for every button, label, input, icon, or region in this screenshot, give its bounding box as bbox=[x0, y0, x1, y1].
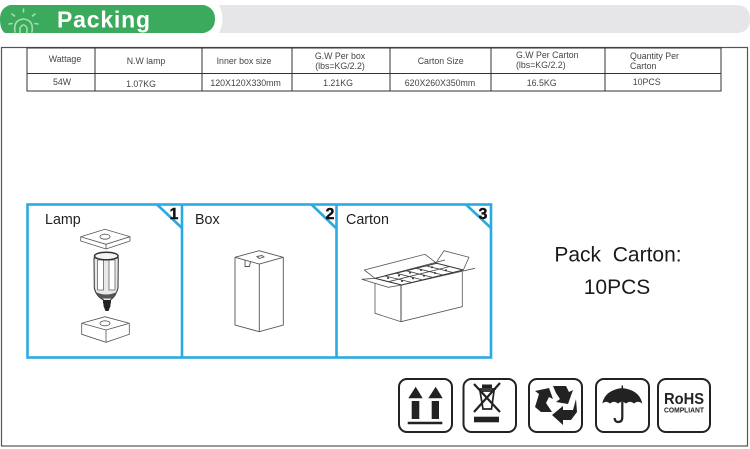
icon: corn bulb bbox=[94, 252, 118, 311]
table text: N.W lamp bbox=[127, 56, 165, 66]
icon: recycle bbox=[529, 379, 582, 432]
table text: 16.5KG bbox=[527, 78, 557, 88]
table text: 1.07KG bbox=[126, 79, 156, 89]
icon: top foam plate bbox=[81, 229, 130, 249]
packing steps panel bbox=[28, 204, 491, 358]
icon: RoHS compliant bbox=[658, 379, 710, 432]
panel borders bbox=[28, 204, 491, 358]
table text: 1.21KG bbox=[323, 78, 353, 88]
table text: (lbs=KG/2.2) bbox=[516, 60, 566, 70]
icon: crossed out bin bbox=[464, 379, 516, 432]
table text: 54W bbox=[53, 77, 72, 87]
header grey bar bbox=[219, 5, 750, 33]
pack carton note bbox=[554, 244, 682, 299]
table text: Carton Size bbox=[418, 56, 464, 66]
icon: this way up bbox=[399, 379, 452, 432]
table text: Inner box size bbox=[217, 56, 271, 66]
table text: 120X120X330mm bbox=[210, 78, 281, 88]
table text bbox=[49, 50, 679, 89]
table text: Carton bbox=[630, 61, 657, 71]
table text: G.W Per box bbox=[315, 51, 366, 61]
step number 2: 2 bbox=[326, 206, 335, 223]
icon: inner box bbox=[235, 251, 283, 332]
header green bar bbox=[0, 5, 215, 33]
table text: Quantity Per bbox=[630, 51, 679, 61]
table grid bbox=[27, 48, 721, 91]
icon: RoHS compliant: COMPLIANT bbox=[664, 406, 704, 415]
compliance icons bbox=[399, 379, 710, 432]
label: Lamp: Lamp bbox=[45, 212, 81, 228]
table text: 620X260X350mm bbox=[405, 78, 475, 88]
text: 10PCS: 10PCS bbox=[584, 276, 650, 299]
icon: keep dry umbrella bbox=[596, 379, 649, 432]
label: Carton: Carton bbox=[346, 212, 389, 228]
step 1: lamp bbox=[45, 206, 179, 342]
text: Pack Carton: Pack Carton: bbox=[554, 244, 682, 267]
table text: G.W Per Carton bbox=[516, 50, 579, 60]
table text: Wattage bbox=[49, 54, 81, 64]
header band bbox=[0, 5, 750, 33]
step 2: box bbox=[195, 206, 335, 332]
icon: light bulb with rays bbox=[9, 9, 38, 33]
step number 1: 1 bbox=[170, 206, 179, 223]
specification table bbox=[27, 48, 721, 91]
step number 3: 3 bbox=[479, 206, 488, 223]
heading: Packing: Packing bbox=[57, 7, 151, 33]
table text: 10PCS bbox=[633, 77, 661, 87]
table text: (lbs=KG/2.2) bbox=[315, 61, 365, 71]
icon: bottom foam block bbox=[82, 317, 129, 342]
icon: open carton bbox=[362, 251, 475, 322]
step 3: carton bbox=[346, 206, 488, 322]
icon: RoHS compliant: RoHS bbox=[664, 391, 704, 408]
label: Box: Box bbox=[195, 212, 220, 228]
